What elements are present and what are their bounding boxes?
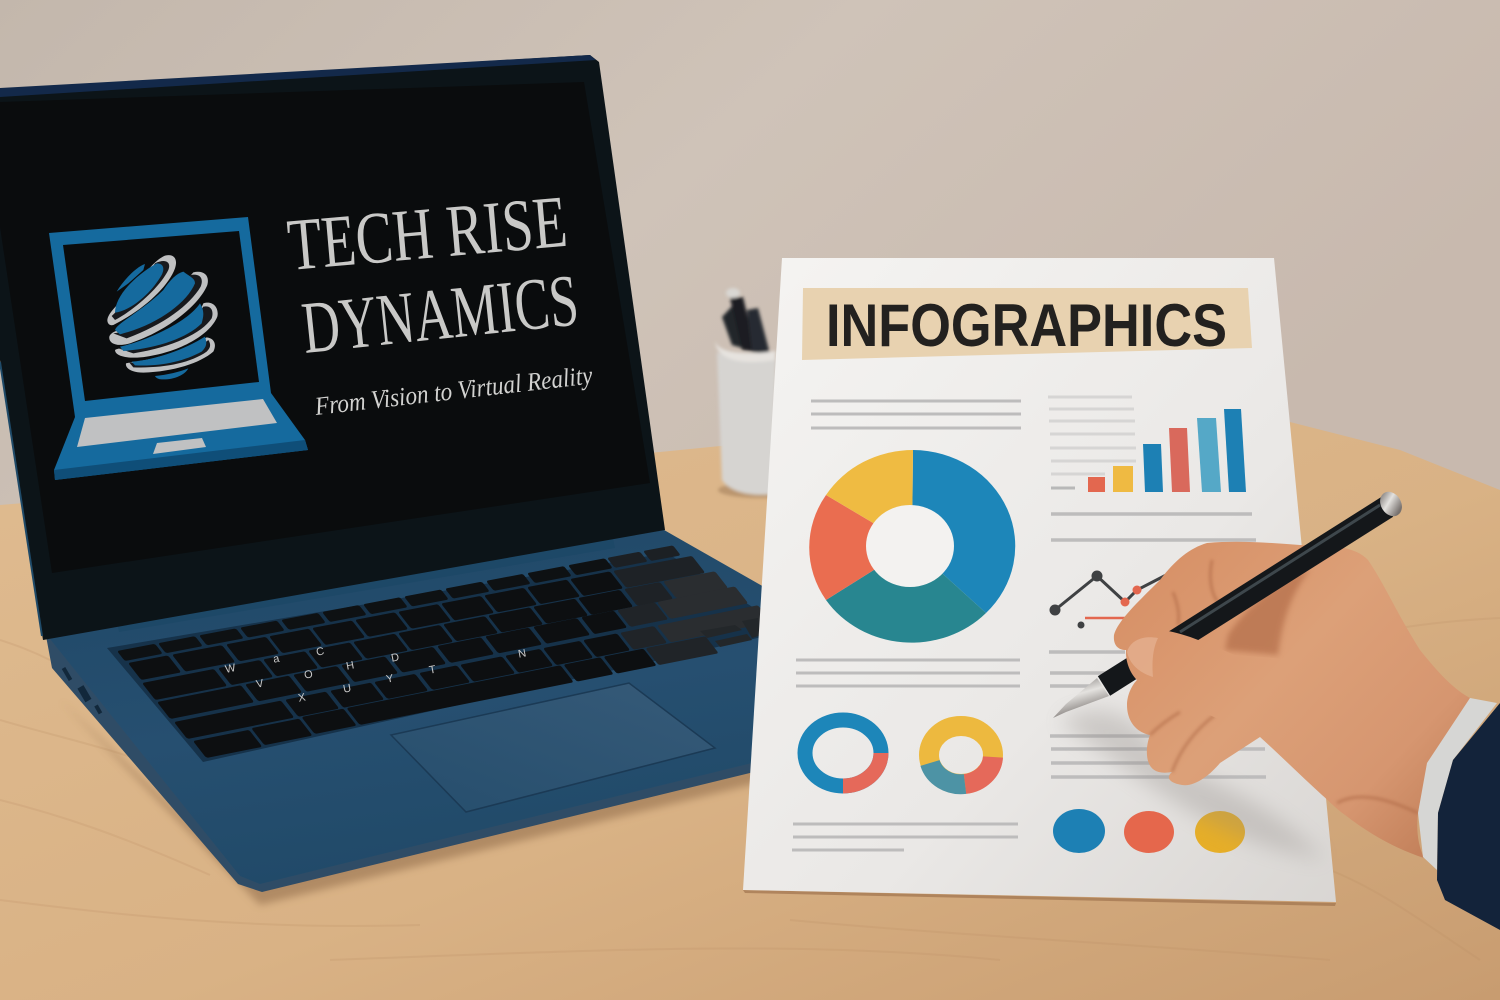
- text lines bottom left: [792, 824, 1018, 850]
- cup rim: [715, 340, 776, 362]
- screen: [0, 82, 650, 573]
- hand shadow on paper: [1060, 710, 1325, 860]
- paper shadow: [743, 890, 1336, 906]
- arrow keys: [700, 618, 761, 647]
- key legends: W: [224, 662, 237, 676]
- lid left edge: [0, 362, 42, 636]
- key legends: H: [345, 659, 355, 673]
- logo: laptop with globe: [49, 217, 308, 480]
- cup shadow: [718, 482, 802, 498]
- title text: INFOGRAPHICS: [826, 292, 1227, 359]
- key legends: C: [315, 645, 325, 659]
- laptop shadow: [60, 700, 770, 905]
- cup body: [717, 352, 776, 495]
- palm shadow by pen: [1225, 570, 1310, 655]
- logo title: [284, 181, 582, 370]
- key legends: T: [428, 664, 437, 677]
- text lines behind hand: [1049, 652, 1266, 777]
- logo laptop frame: [49, 217, 308, 480]
- ring chart blue red: [805, 720, 881, 786]
- lid bezel: [0, 55, 665, 640]
- text lines mid left: [796, 660, 1020, 686]
- function key row: [117, 545, 681, 661]
- keyboard: [107, 545, 771, 762]
- key legends: O: [303, 668, 314, 682]
- laptop deck: [46, 530, 764, 884]
- title band: [802, 288, 1252, 360]
- logo screen: [63, 231, 259, 401]
- paper sheet: [743, 258, 1336, 902]
- donut chart: [809, 450, 1015, 643]
- logo globe: [107, 255, 218, 379]
- logo title: TECH RISE: [284, 181, 570, 287]
- trackpad: [391, 683, 715, 812]
- side ports: [62, 667, 102, 714]
- lower letter key row: [174, 605, 771, 739]
- ring chart yellow red teal: [929, 726, 993, 784]
- pen cap: [1376, 488, 1406, 520]
- palm and fingers: [1114, 542, 1470, 858]
- thumbnail: [1127, 637, 1158, 677]
- line chart: [1050, 570, 1170, 628]
- key legends: U: [342, 682, 352, 696]
- rules below bars: [1051, 514, 1256, 540]
- hinge strip: [117, 538, 615, 632]
- text lines beside bars: [1048, 397, 1136, 488]
- key legends: a: [272, 653, 281, 666]
- wooden desk: [0, 422, 1500, 1000]
- bottom key row with space bar: [191, 636, 720, 758]
- shirt cuff: [1418, 698, 1497, 870]
- logo keyboard: [77, 399, 277, 447]
- colour dots: [1053, 809, 1245, 853]
- number key row: [128, 556, 705, 680]
- laptop: [0, 55, 771, 905]
- logo trackpad: [153, 438, 206, 454]
- logo base lip: [54, 440, 308, 480]
- bar chart: [1088, 409, 1246, 492]
- key legends: D: [390, 651, 400, 665]
- thumb: [1126, 629, 1300, 737]
- logo title: DYNAMICS: [298, 259, 582, 370]
- laptop base side: [46, 530, 764, 892]
- pen: [1053, 488, 1406, 718]
- hand holding pen: [1053, 488, 1500, 930]
- key legends: V: [255, 677, 265, 691]
- text lines top left: [811, 401, 1021, 428]
- pen tip: [1053, 678, 1109, 718]
- finger creases: [1150, 560, 1418, 813]
- pens in cup: [722, 288, 770, 354]
- lid top edge: [0, 55, 596, 97]
- keyboard well: [107, 553, 762, 762]
- infographic paper: [743, 258, 1336, 906]
- key legends: [224, 645, 527, 705]
- key legends: Y: [385, 672, 395, 686]
- key legends: X: [297, 691, 307, 705]
- logo tagline: From Vision to Virtual Reality: [313, 361, 594, 421]
- wall background: [0, 0, 1500, 540]
- jacket sleeve: [1437, 703, 1500, 930]
- key legends: N: [517, 647, 527, 661]
- upper letter key row: [142, 571, 728, 700]
- middle letter key row: [157, 586, 748, 719]
- pen holder cup: [715, 288, 802, 498]
